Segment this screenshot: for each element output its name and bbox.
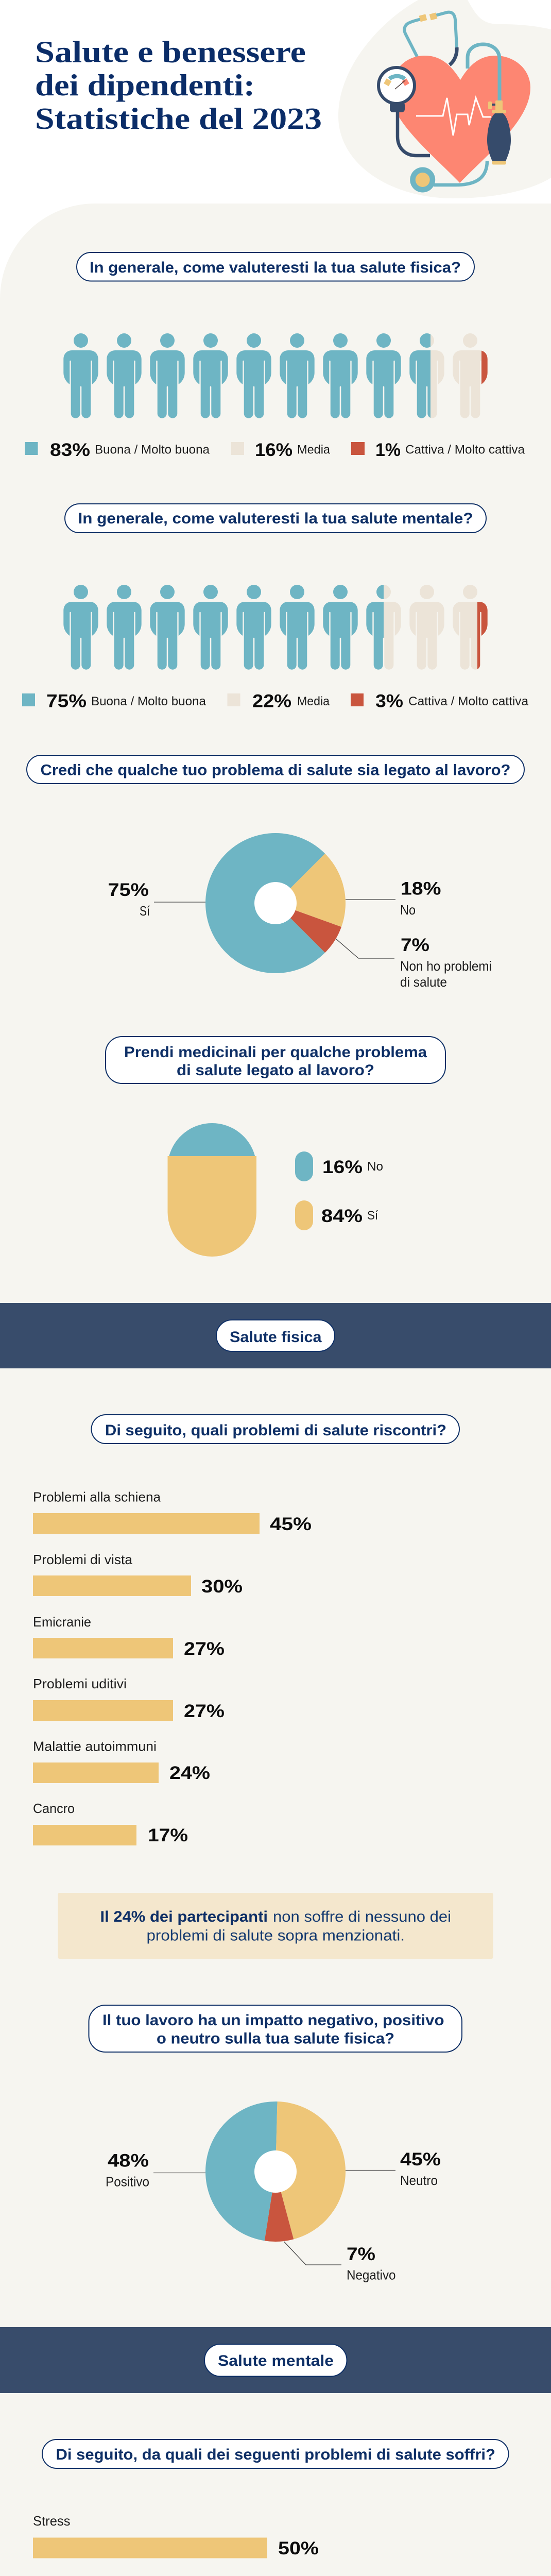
question: mental problems: Di seguito, da quali dei seguenti problemi di salute soffri? xyxy=(56,2446,495,2463)
legend: mental health: 3% xyxy=(375,691,403,711)
legend: medication yes xyxy=(295,1200,378,1230)
question: mental health: In generale, come valuteresti la tua salute mentale? xyxy=(78,510,473,527)
bar: stress: 50% xyxy=(278,2538,319,2558)
bar: migraines xyxy=(33,1614,225,1659)
label: 7% no health problems xyxy=(336,935,492,990)
label: 7% negative: 7% xyxy=(347,2244,375,2264)
legend: medication no: 16% xyxy=(322,1157,363,1177)
legend: medication yes: 84% xyxy=(321,1206,363,1226)
bar: vision problems: Problemi di vista xyxy=(33,1552,133,1567)
label: 75% yes xyxy=(108,880,205,919)
legend: mental health xyxy=(22,691,529,711)
label: 48% positive: Positivo xyxy=(106,2174,149,2190)
question: work-related problem: Credi che qualche tuo problema di salute sia legato al lavoro? xyxy=(40,761,511,779)
label: 7% no health problems: di salute xyxy=(400,974,447,990)
label: 18% no: 18% xyxy=(401,879,441,899)
label: 45% neutral: 45% xyxy=(400,2149,441,2170)
panel: work-related health problem xyxy=(27,755,524,990)
bar: back problems: 45% xyxy=(270,1514,312,1534)
legend: physical health: Cattiva / Molto cattiva xyxy=(405,443,525,456)
section banner: mental health xyxy=(0,2327,551,2393)
question: medication: Prendi medicinali per qualche problema xyxy=(124,1044,427,1061)
callout: 24% no problems: problemi di salute sopra menzionati. xyxy=(146,1927,405,1944)
bar: hearing problems: 27% xyxy=(184,1701,225,1721)
bar: autoimmune diseases: 24% xyxy=(169,1763,210,1783)
bar: hearing problems: Problemi uditivi xyxy=(33,1676,127,1691)
question: mental health xyxy=(65,504,486,533)
title: dei dipendenti: xyxy=(35,68,255,102)
question: medication: di salute legato al lavoro? xyxy=(177,1062,374,1079)
bar: cancer: Cancro xyxy=(33,1801,75,1816)
donut chart: work-related problem xyxy=(205,833,346,973)
bar: autoimmune diseases: Malattie autoimmuni xyxy=(33,1738,157,1754)
question: work-related problem xyxy=(27,755,524,784)
label: 45% neutral: Neutro xyxy=(400,2173,438,2188)
label: 45% neutral xyxy=(346,2149,441,2188)
question: mental problems xyxy=(42,2439,509,2468)
legend: mental health: Buona / Molto buona xyxy=(91,694,206,708)
bar chart: physical problems xyxy=(33,1489,312,1845)
bar: vision problems xyxy=(33,1552,243,1597)
legend: physical health: Buona / Molto buona xyxy=(95,443,210,456)
question: medication xyxy=(106,1037,445,1083)
legend: physical health xyxy=(25,440,525,460)
section banner: physical health: Salute fisica xyxy=(230,1329,322,1346)
legend: medication no xyxy=(295,1151,383,1181)
pictogram: mental health people xyxy=(63,585,488,670)
panel: medication xyxy=(106,1037,445,1257)
question: impact on physical health: Il tuo lavoro ha un impatto negativo, positivo xyxy=(102,2012,444,2029)
pictogram: physical health people xyxy=(63,333,488,418)
label: 7% negative: Negativo xyxy=(347,2267,395,2282)
bar: autoimmune diseases xyxy=(33,1738,210,1783)
legend: physical health: 83% xyxy=(50,440,90,460)
label: 7% negative xyxy=(284,2242,395,2282)
question: physical problems: Di seguito, quali problemi di salute riscontri? xyxy=(105,1422,446,1439)
bar: cancer xyxy=(33,1801,188,1845)
question: impact on physical health xyxy=(89,2005,462,2052)
icon: heart with stethoscope and blood pressure gauge xyxy=(378,12,530,193)
label: 75% yes: Sí xyxy=(140,903,150,919)
bar: migraines: Emicranie xyxy=(33,1614,91,1630)
section banner: physical health xyxy=(0,1303,551,1368)
bar: vision problems: 30% xyxy=(201,1577,243,1597)
legend: mental health: Media xyxy=(297,694,330,708)
section banner: mental health: Salute mentale xyxy=(218,2352,334,2369)
legend: mental health: 75% xyxy=(46,691,87,711)
bar: stress xyxy=(33,2513,319,2558)
panel: mental health rating xyxy=(22,504,529,711)
label: 7% no health problems: Non ho problemi xyxy=(400,958,492,974)
panel: job impact on physical health xyxy=(89,2005,462,2282)
bar: cancer: 17% xyxy=(148,1825,188,1845)
label: 75% yes: 75% xyxy=(108,880,149,900)
label: 48% positive: 48% xyxy=(108,2150,149,2171)
bar: stress: Stress xyxy=(33,2513,70,2529)
bar chart: mental problems xyxy=(33,2513,319,2576)
donut chart: impact on physical health xyxy=(205,2102,346,2242)
title xyxy=(35,35,322,135)
question: physical problems xyxy=(92,1415,459,1444)
label: 48% positive xyxy=(106,2150,205,2190)
panel: physical health rating xyxy=(25,252,525,460)
bar: back problems: Problemi alla schiena xyxy=(33,1489,161,1504)
pill chart: medication xyxy=(168,1123,256,1257)
callout: 24% no problems: Il 24% dei partecipanti xyxy=(100,1908,268,1925)
legend: medication no: No xyxy=(367,1160,383,1174)
legend: medication yes: Sí xyxy=(367,1209,378,1223)
bar: back problems xyxy=(33,1489,312,1534)
legend: physical health: Media xyxy=(297,443,331,456)
question: impact on physical health: o neutro sulla tua salute fisica? xyxy=(157,2030,394,2047)
title: Statistiche del 2023 xyxy=(35,101,322,135)
label: 18% no: No xyxy=(400,902,416,918)
bar: migraines: 27% xyxy=(184,1639,225,1659)
legend: physical health: 16% xyxy=(255,440,292,460)
callout: 24% no problems: non soffre di nessuno dei xyxy=(273,1908,451,1925)
label: 18% no xyxy=(346,879,441,918)
callout: 24% no problems xyxy=(58,1893,493,1959)
legend: physical health: 1% xyxy=(375,440,401,460)
title: Salute e benessere xyxy=(35,35,306,69)
legend: mental health: Cattiva / Molto cattiva xyxy=(408,694,529,708)
question: physical health xyxy=(77,252,474,281)
bar: hearing problems xyxy=(33,1676,225,1721)
header background blob xyxy=(338,0,551,198)
question: physical health: In generale, come valuteresti la tua salute fisica? xyxy=(90,259,461,276)
legend: mental health: 22% xyxy=(252,691,291,711)
label: 7% no health problems: 7% xyxy=(401,935,429,955)
